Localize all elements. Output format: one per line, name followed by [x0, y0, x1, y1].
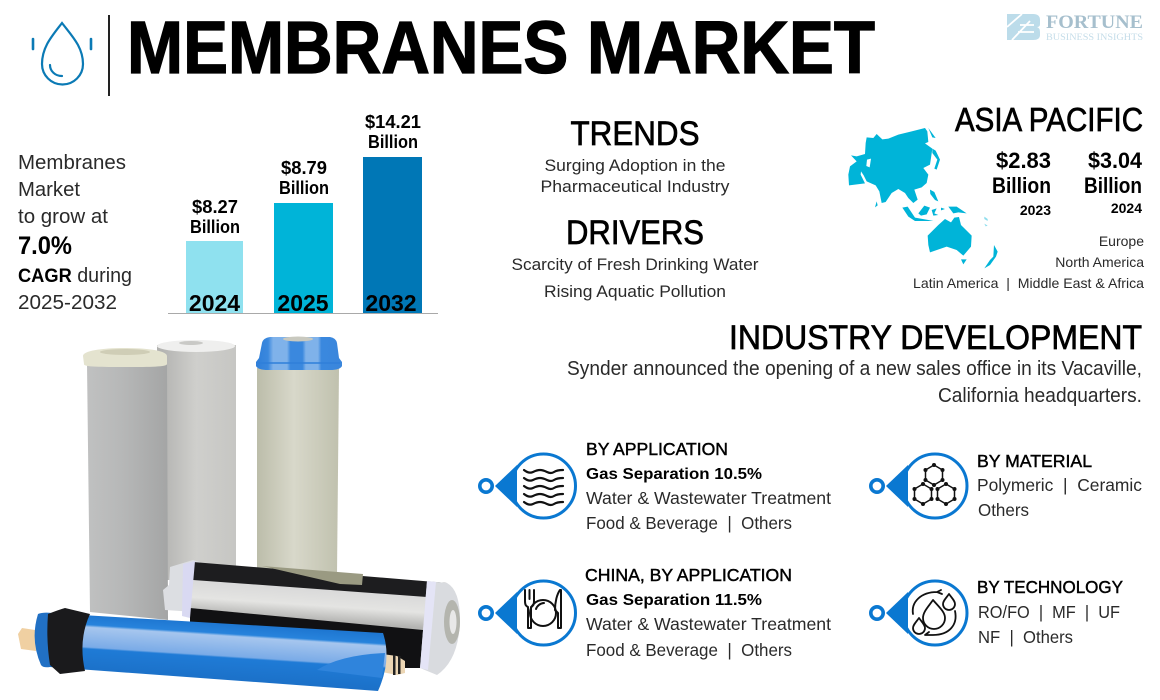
value 2024: $3.04 [1088, 148, 1143, 173]
product photo: membrane cartridges [18, 336, 460, 691]
growth text: 2025-2032 [18, 291, 117, 314]
growth text: CAGR during [18, 264, 132, 287]
bar 2024 [186, 197, 243, 316]
icon: waves [480, 454, 576, 518]
bar 2024: $8.27 [192, 197, 238, 217]
title: MEMBRANES MARKET [127, 6, 875, 89]
cartridge: transparent black [163, 560, 460, 675]
icon: plate and cutlery [480, 581, 576, 645]
bar 2032: 2032 [365, 290, 417, 316]
drivers: DRIVERS [566, 214, 704, 252]
trends: Surging Adoption in the [544, 156, 726, 175]
text: Gas Separation 11.5% [586, 592, 762, 609]
drivers: Scarcity of Fresh Drinking Water [512, 255, 759, 274]
bar 2024: 2024 [189, 290, 240, 316]
clear shell ends [163, 560, 200, 612]
growth text: Market [18, 178, 80, 201]
other regions: Latin America | Middle East & Africa [913, 275, 1144, 291]
text: Others [978, 500, 1029, 520]
cartridge: pleated with blue cap [256, 336, 342, 575]
logo: Fortune Business Insights: FORTUNE [1046, 12, 1143, 33]
bar 2032 [363, 112, 422, 316]
industry development [567, 319, 1142, 407]
trends [540, 115, 730, 196]
segment: by application [480, 439, 831, 533]
growth text: to grow at [18, 205, 108, 228]
other regions [913, 233, 1144, 291]
text: Water & Wastewater Treatment [586, 488, 831, 508]
text [977, 577, 1123, 647]
bar chart [168, 112, 438, 316]
text: Food & Beverage | Others [586, 640, 792, 660]
text: Food & Beverage | Others [586, 513, 792, 533]
trends: TRENDS [570, 115, 700, 153]
segment: China, by application [480, 565, 831, 660]
value 2024: 2024 [1111, 200, 1142, 216]
cartridge: blue membrane [18, 608, 405, 691]
bar 2032: $14.21 [365, 112, 421, 132]
text: BY APPLICATION [586, 439, 728, 459]
map: Asia Pacific [848, 128, 998, 268]
trends: Pharmaceutical Industry [540, 177, 730, 196]
text [977, 451, 1142, 520]
icon: water cycle [871, 581, 967, 645]
text: BY TECHNOLOGY [977, 577, 1123, 597]
growth text: Membranes [18, 151, 126, 174]
icon: water drop [33, 23, 91, 84]
drivers [512, 214, 759, 301]
value 2024 [1084, 148, 1143, 216]
text: Polymeric | Ceramic [977, 475, 1142, 495]
value 2023 [992, 148, 1051, 218]
other regions: North America [1055, 254, 1144, 270]
segment: by technology [871, 577, 1123, 647]
text: Water & Wastewater Treatment [586, 614, 831, 634]
value 2023: $2.83 [996, 148, 1051, 173]
text: NF | Others [978, 627, 1073, 647]
header divider [108, 15, 110, 96]
industry development: California headquarters. [938, 384, 1142, 407]
bar 2025 [274, 158, 333, 316]
bar 2032: Billion [368, 132, 418, 152]
bar 2025: Billion [279, 178, 329, 198]
text: RO/FO | MF | UF [978, 602, 1120, 622]
cartridge: white gray [157, 340, 236, 580]
logo: Fortune Business Insights: BUSINESS INSIGHTS [1046, 33, 1143, 43]
text [586, 439, 831, 533]
value 2023: 2023 [1020, 202, 1051, 218]
cartridge: gray with cream cap [83, 348, 168, 620]
bar 2025: $8.79 [281, 158, 327, 178]
text: CHINA, BY APPLICATION [585, 565, 792, 585]
text: Gas Separation 10.5% [586, 466, 762, 483]
other regions: Europe [1099, 233, 1144, 249]
text: BY MATERIAL [977, 451, 1092, 471]
drivers: Rising Aquatic Pollution [544, 282, 726, 301]
text [585, 565, 831, 660]
value 2023: Billion [992, 173, 1051, 198]
region: Asia Pacific heading: ASIA PACIFIC [955, 101, 1143, 138]
icon: molecule [871, 454, 967, 518]
growth text [18, 151, 132, 314]
industry development: INDUSTRY DEVELOPMENT [729, 319, 1142, 357]
bar 2025: 2025 [277, 290, 329, 316]
growth text: 7.0% [18, 232, 72, 260]
value 2024: Billion [1084, 173, 1142, 198]
segment: by material [871, 451, 1142, 520]
logo: Fortune Business Insights [1007, 12, 1143, 43]
bar 2024: Billion [190, 217, 240, 237]
